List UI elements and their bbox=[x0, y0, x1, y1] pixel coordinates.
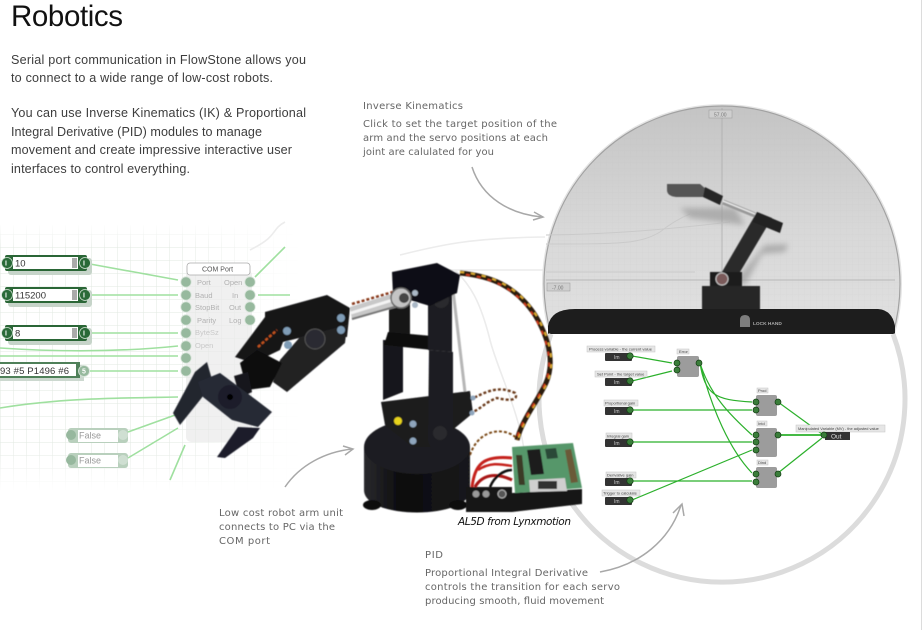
module: COM port: Out bbox=[229, 303, 242, 312]
node: Intd bbox=[753, 421, 781, 457]
faint dome lines bbox=[546, 214, 730, 272]
front arm plate bbox=[428, 350, 453, 448]
module: COM port: Parity bbox=[197, 316, 216, 325]
text block: IK and PID modules: You can use Inverse Kinematics (IK) & Proportional bbox=[11, 106, 306, 120]
input: false 2: False bbox=[79, 456, 101, 466]
coordinate readout left: -7.00 bbox=[552, 286, 564, 292]
base cylinder bbox=[364, 447, 470, 512]
callout: PID: producing smooth, fluid movement bbox=[425, 596, 604, 607]
input: process variable bbox=[587, 346, 655, 361]
wrist wires bbox=[258, 330, 277, 347]
input: baud value 115200 bbox=[2, 287, 92, 307]
node: Dind bbox=[753, 460, 781, 488]
node: Intd: Intd bbox=[758, 421, 765, 426]
chart: PID node graph bbox=[587, 346, 885, 505]
rear arm plates bbox=[389, 300, 410, 345]
output: manipulated variable: Out bbox=[831, 434, 842, 440]
input: port value 10: I bbox=[83, 260, 85, 268]
callout: PID bbox=[425, 550, 620, 607]
lock hand button bbox=[740, 315, 782, 327]
input: integral gain: Im bbox=[614, 441, 620, 447]
control bar bbox=[548, 309, 895, 334]
module: COM port: COM Port bbox=[202, 266, 233, 274]
arrow: PID bbox=[600, 504, 684, 572]
module: COM port: In bbox=[232, 291, 238, 300]
input: baud value 115200: 115200 bbox=[15, 290, 46, 302]
callout: inverse kinematics: joint are calulated for you bbox=[362, 147, 494, 158]
input: false 1 bbox=[66, 428, 128, 443]
arrow: inverse kinematics bbox=[472, 167, 543, 220]
callout: PID: PID bbox=[425, 550, 443, 561]
arrow: robot arm bbox=[285, 446, 353, 487]
module: COM port: ByteSz bbox=[195, 328, 219, 337]
graph wires bbox=[632, 356, 822, 500]
silver forearm tube bbox=[350, 292, 402, 320]
tube wire bbox=[352, 292, 393, 304]
chart: COM port node graph bbox=[0, 247, 290, 480]
input: baud value 115200: I bbox=[5, 292, 7, 300]
coordinate readout top bbox=[709, 110, 732, 118]
module: COM port: Open bbox=[195, 341, 213, 350]
callout: low cost robot arm: COM port bbox=[219, 536, 270, 547]
callout: inverse kinematics: Click to set the target position of the bbox=[363, 119, 557, 130]
node: Error bbox=[674, 349, 702, 377]
node: Error: Error bbox=[679, 349, 689, 354]
tube collar bbox=[391, 288, 411, 308]
input: byte size 8: I bbox=[5, 330, 7, 338]
input: servo string: 93 #5 P1496 #6 bbox=[0, 366, 69, 377]
module: COM port: StopBit bbox=[195, 303, 220, 312]
text block: IK and PID modules: Integral Derivative (PID) modules to manage bbox=[11, 125, 262, 139]
page edge line bbox=[920, 0, 922, 630]
servo wires upper bbox=[460, 272, 551, 455]
arm shadow bbox=[680, 208, 788, 285]
input: proportional gain bbox=[604, 400, 638, 415]
title: Robotics bbox=[11, 0, 123, 33]
input: byte size 8: 8 bbox=[15, 328, 20, 340]
wrist servo bbox=[240, 350, 282, 390]
link rod bbox=[453, 290, 465, 392]
connection wires bbox=[0, 247, 290, 480]
module: COM port bbox=[181, 263, 255, 442]
coordinate readout left bbox=[547, 283, 570, 292]
node: Dind: Dind bbox=[758, 460, 766, 465]
input: integral gain bbox=[605, 433, 633, 447]
illustration: robot arm bbox=[173, 263, 582, 512]
input: byte size 8 bbox=[2, 325, 92, 345]
input: process variable: Process variable - the current value bbox=[589, 346, 653, 352]
power wires bbox=[472, 457, 512, 487]
text block: serial port intro: Serial port communication in FlowStone allows you bbox=[11, 53, 306, 67]
text block: serial port intro bbox=[11, 53, 306, 85]
input: derivative gain bbox=[605, 472, 636, 486]
input: baud value 115200: I bbox=[83, 292, 85, 300]
input: proportional gain: Im bbox=[614, 409, 620, 415]
input: false 2 bbox=[66, 453, 128, 468]
callout: inverse kinematics: arm and the servo positions at each bbox=[363, 133, 548, 144]
lock hand button: LOCK HAND bbox=[753, 321, 782, 327]
module: COM port: Open bbox=[224, 278, 242, 287]
callout: PID: controls the transition for each servo bbox=[425, 582, 620, 593]
input: port value 10: I bbox=[5, 260, 7, 268]
input: byte size 8: I bbox=[83, 330, 85, 338]
switches bbox=[472, 490, 480, 498]
text block: IK and PID modules: movement and create impressive interactive user bbox=[11, 143, 292, 157]
circuit board bbox=[512, 443, 582, 493]
text block: IK and PID modules bbox=[11, 106, 306, 176]
elbow bracket bbox=[392, 263, 460, 306]
input: port value 10: 10 bbox=[15, 258, 26, 270]
text block: serial port intro: to connect to a wide range of low-cost robots. bbox=[11, 71, 273, 85]
input: set point bbox=[595, 371, 647, 386]
input: trigger: Im bbox=[614, 499, 620, 505]
module: COM port: Port bbox=[197, 278, 212, 287]
input: trigger: Trigger to calculate bbox=[603, 490, 638, 496]
input: trigger bbox=[602, 490, 640, 505]
node: Prod bbox=[753, 388, 781, 416]
small side-view robot arm bbox=[667, 184, 783, 310]
faint background connector lines bbox=[250, 222, 545, 500]
input: derivative gain: Derivative gain bbox=[607, 472, 633, 478]
panel: inverse kinematics dome bbox=[542, 104, 902, 334]
callout: PID: Proportional Integral Derivative bbox=[425, 568, 588, 579]
module: COM port: Baud bbox=[195, 291, 213, 300]
input: false 1: False bbox=[79, 430, 101, 440]
output: manipulated variable bbox=[796, 425, 885, 440]
caption: AL5D from Lynxmotion: AL5D from Lynxmotion bbox=[457, 516, 571, 528]
wrist bracket bbox=[235, 295, 350, 363]
input: servo string bbox=[0, 362, 90, 381]
servo neck bbox=[234, 372, 252, 398]
text block: IK and PID modules: interfaces to control everything. bbox=[11, 162, 190, 176]
callout: low cost robot arm bbox=[219, 508, 343, 547]
input: set point: Set Point - the target value bbox=[597, 372, 645, 376]
electronics plate bbox=[466, 487, 582, 512]
input: servo string: 5 bbox=[82, 368, 86, 376]
input: process variable: Im bbox=[614, 355, 620, 361]
callout: low cost robot arm: connects to PC via the bbox=[219, 522, 335, 533]
input: integral gain: Integral gain bbox=[607, 434, 629, 438]
module: COM port: Log bbox=[229, 316, 242, 325]
output: manipulated variable: Manipulated Variable (MV) - the adjusted value bbox=[798, 426, 879, 431]
coordinate readout top: 57.00 bbox=[714, 112, 727, 118]
serial connector bbox=[529, 478, 567, 492]
input: proportional gain: Proportional gain bbox=[605, 400, 635, 406]
input: set point: Im bbox=[614, 380, 620, 386]
base servo bbox=[381, 391, 473, 447]
callout: low cost robot arm: Low cost robot arm unit bbox=[219, 508, 343, 519]
background grid bbox=[0, 229, 265, 480]
callout: inverse kinematics bbox=[362, 101, 557, 158]
input: derivative gain: Im bbox=[614, 480, 620, 486]
wrist side plate bbox=[273, 325, 347, 392]
callout: inverse kinematics: Inverse Kinematics bbox=[363, 101, 463, 112]
node: Prod: Prod bbox=[758, 388, 766, 393]
crosshair lines bbox=[546, 108, 895, 300]
input: port value 10 bbox=[2, 255, 92, 275]
panel: PID ring bbox=[539, 334, 905, 582]
gripper bbox=[173, 362, 213, 425]
